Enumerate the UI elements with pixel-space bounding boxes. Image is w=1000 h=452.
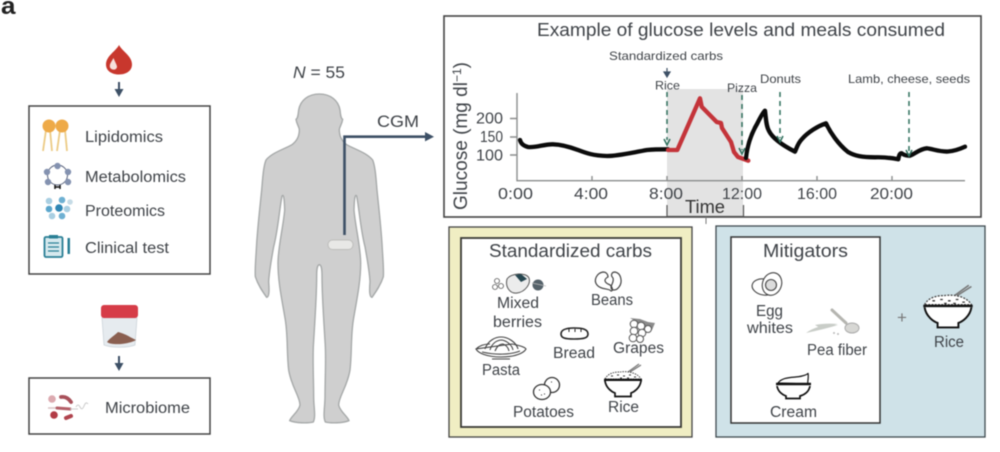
text: Rice right: Rice [934, 334, 964, 351]
icon: rice bowl [604, 364, 642, 396]
text: Proteomics: Proteomics [85, 203, 165, 220]
meal marker Standardized carbs and Rice [609, 49, 723, 145]
heading: Mitigators [763, 241, 848, 261]
x axis labels: 20:00 [870, 186, 913, 203]
icon: proteins [46, 197, 73, 219]
text: CGM: CGM [377, 112, 419, 131]
icon: pasta plate [476, 337, 526, 359]
icon: clipboard [44, 235, 70, 257]
text: Microbiome: Microbiome [105, 400, 190, 417]
text: Bread: Bread [553, 345, 595, 362]
panel: omics [29, 106, 210, 274]
x axis labels [498, 186, 913, 203]
text: sample size: N = 55 [293, 63, 345, 82]
meal marker Donuts: Donuts [760, 72, 801, 86]
shaded window [667, 89, 743, 216]
text: Metabolomics: Metabolomics [85, 169, 186, 186]
text: berries line: berries [493, 314, 542, 331]
icon: beans [595, 272, 621, 291]
icon: metabolite ring [44, 163, 71, 189]
icon: potatoes [534, 378, 560, 400]
meal marker Standardized carbs and Rice: Rice [655, 78, 680, 92]
text: Potatoes: Potatoes [513, 404, 574, 421]
panel: glucose chart [444, 16, 981, 217]
y axis title: ) [451, 62, 472, 68]
icon: lipids [42, 120, 68, 151]
meal marker Lamb, cheese, seeds: Lamb, cheese, seeds [848, 72, 970, 86]
arrow: blood to omics [114, 82, 124, 97]
x axis labels: 16:00 [797, 186, 837, 203]
arrow: jar to microbiome [114, 356, 124, 371]
x axis labels: 8:00 [649, 186, 683, 203]
heading: Standardized carbs [489, 241, 652, 261]
icon: CGM sensor [328, 240, 353, 250]
glucose curve black [520, 140, 668, 156]
text: Rice: Rice [608, 399, 639, 416]
text: Lipidomics: Lipidomics [85, 129, 163, 146]
icon: pea fiber spoon [806, 310, 859, 335]
icon: microbes [48, 395, 88, 419]
text: Egg whites: Egg [756, 303, 783, 320]
arrow: CGM to glucose chart [344, 132, 434, 235]
glucose curve red standardized carbs [668, 98, 748, 161]
y axis labels: 150 [480, 129, 503, 146]
meal marker Lamb, cheese, seeds [848, 72, 970, 156]
y axis title: −1 [450, 68, 464, 82]
text: Pea fiber: Pea fiber [807, 342, 867, 359]
y axis labels: 100 [476, 148, 503, 164]
text: Pasta: Pasta [482, 362, 520, 379]
panel: microbiome [29, 378, 210, 434]
icon: blood drop [106, 45, 132, 74]
y axis labels [476, 110, 503, 164]
icon: stool sample jar [101, 305, 138, 347]
icon: cream bowl [776, 373, 811, 398]
axes [510, 93, 965, 181]
icon: rice bowl large [923, 285, 973, 327]
text: Cream: Cream [770, 404, 817, 421]
x axis labels: 4:00 [574, 186, 608, 203]
icon: mixed berries [492, 274, 546, 293]
text: Mixed berries: Mixed [497, 295, 539, 312]
plus sign: + [897, 308, 907, 327]
window bracket [667, 205, 744, 216]
meal marker Standardized carbs and Rice: Standardized carbs [609, 49, 723, 63]
connector: time to food panels [705, 217, 707, 224]
panel: mitigators [716, 226, 985, 437]
text: Clinical test: Clinical test [85, 240, 170, 257]
glucose curve black after meal [746, 111, 965, 159]
icon: egg [751, 270, 785, 298]
x axis labels: 0:00 [498, 186, 533, 203]
text: Grapes: Grapes [613, 340, 664, 357]
text: whites line: whites [746, 320, 793, 337]
icon: bread [561, 328, 588, 339]
icon: grapes [629, 318, 655, 342]
chart title: Example of glucose levels and meals consumed [537, 19, 945, 40]
axis title Time: Time [685, 196, 725, 217]
x axis labels: 12:00 [722, 186, 762, 203]
text: Beans: Beans [591, 292, 633, 309]
meal marker Pizza: Pizza [727, 81, 757, 95]
icon: human body [255, 94, 384, 423]
meal marker Donuts [760, 72, 801, 142]
y axis title: Glucose (mg dl [451, 82, 472, 210]
panel: standardized carbs [449, 227, 692, 437]
y axis labels: 200 [476, 110, 503, 128]
meal marker Pizza [727, 81, 757, 154]
